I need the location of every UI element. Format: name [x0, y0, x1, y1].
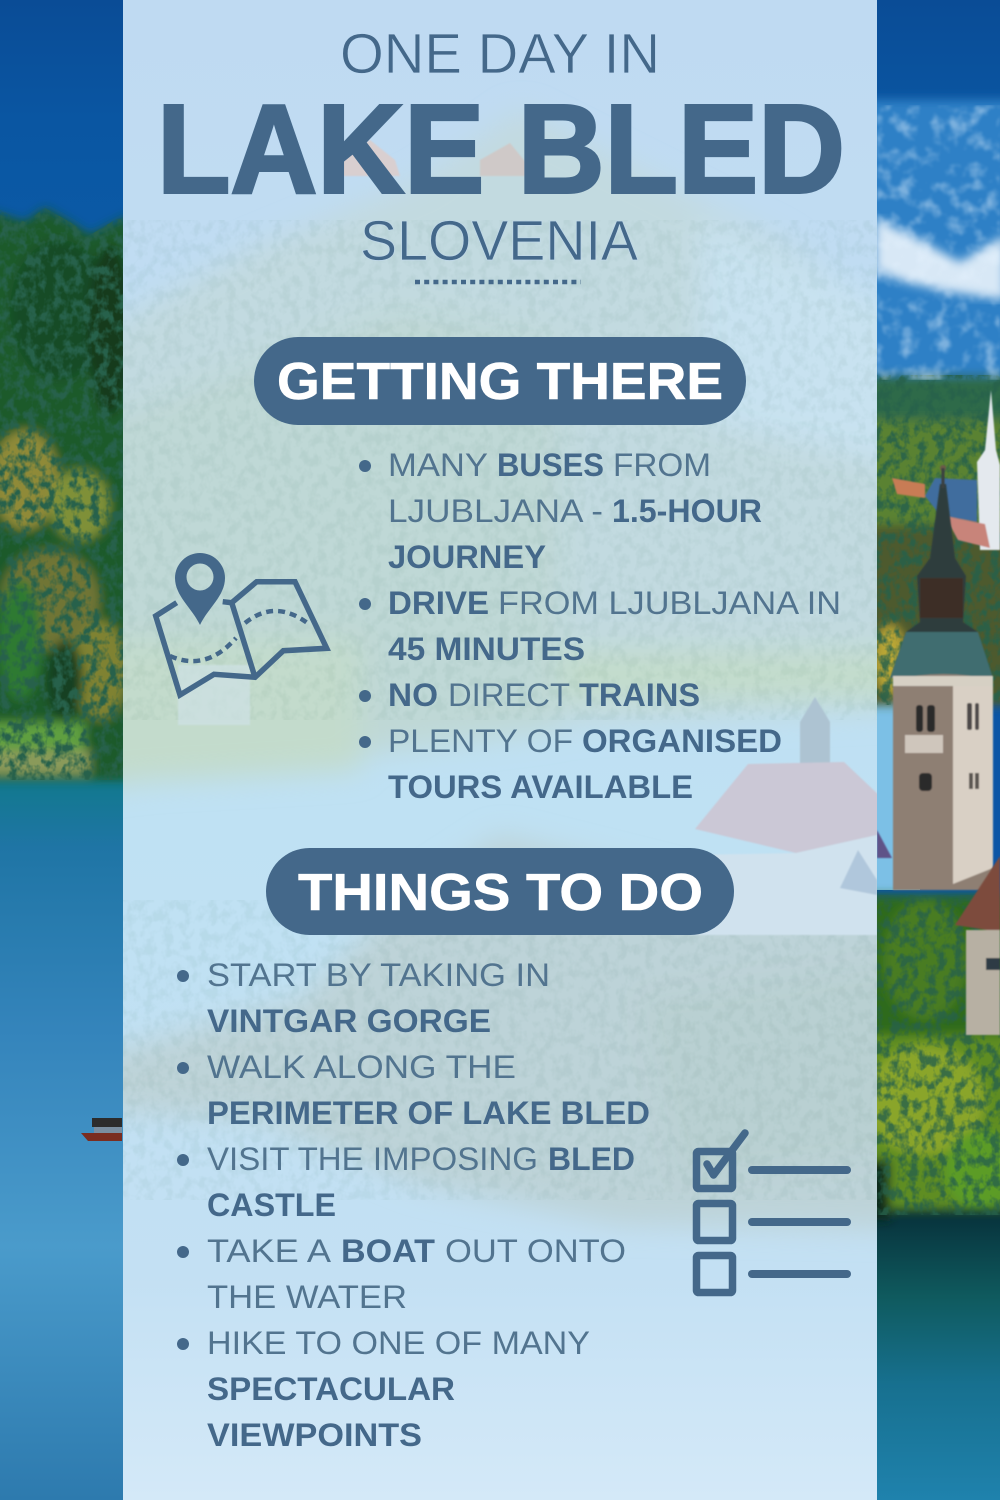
- item: trains: TRAINS: [579, 677, 700, 713]
- item: boat: TAKE A: [207, 1233, 332, 1269]
- house behind the trees: [955, 856, 1000, 1035]
- item: buses: MANY: [388, 447, 488, 483]
- item: viewpoints: VIEWPOINTS: [207, 1417, 422, 1453]
- item: viewpoints: SPECTACULAR: [207, 1371, 455, 1407]
- distant church on right hill: [892, 390, 1000, 550]
- item: boat: THE WATER: [207, 1279, 407, 1315]
- bell tower: [877, 465, 993, 890]
- title: slovenia: SLOVENIA: [360, 209, 638, 273]
- far mountain and sky: [0, 0, 1000, 270]
- item: buses: FROM: [613, 447, 711, 483]
- item: trains: [359, 677, 700, 713]
- item: viewpoints: [177, 1325, 590, 1453]
- icon: checklist: [696, 1133, 847, 1292]
- list: getting there: [359, 447, 841, 805]
- heading pill: things to do: THINGS TO DO: [298, 864, 703, 922]
- item: boat: OUT ONTO: [445, 1233, 626, 1269]
- item: buses: LJUBLJANA -: [388, 493, 603, 529]
- item: buses: BUSES: [497, 447, 604, 483]
- title: lake bled: LAKE BLED: [157, 78, 845, 220]
- foliage texture on tree areas: [0, 205, 1000, 1215]
- item: buses: 1.5-HOUR: [612, 493, 762, 529]
- lake water: [0, 690, 1000, 1500]
- faded white villa: [178, 665, 250, 725]
- item: bled castle: VISIT THE IMPOSING: [207, 1141, 538, 1177]
- item: buses: JOURNEY: [388, 539, 546, 575]
- item: perimeter walk: WALK ALONG THE: [207, 1049, 516, 1085]
- item: perimeter walk: [177, 1049, 650, 1131]
- list: things to do: [177, 957, 650, 1453]
- item: buses: [359, 447, 762, 575]
- item: vintgar gorge: VINTGAR GORGE: [207, 1003, 491, 1039]
- item: bled castle: BLED: [548, 1141, 635, 1177]
- item: trains: NO: [388, 677, 438, 713]
- heading pill: getting there: [254, 337, 746, 425]
- item: bled castle: [177, 1141, 635, 1223]
- blurred landscape masses: [0, 100, 1000, 1220]
- title: one day in: ONE DAY IN: [340, 22, 660, 86]
- item: boat: BOAT: [341, 1233, 435, 1269]
- item: tours: TOURS AVAILABLE: [388, 769, 693, 805]
- item: perimeter walk: PERIMETER OF LAKE BLED: [207, 1095, 650, 1131]
- item: bled castle: CASTLE: [207, 1187, 336, 1223]
- item: boat: [177, 1233, 626, 1315]
- item: drive: DRIVE: [388, 585, 489, 621]
- white rock patch on mountain: [875, 218, 1000, 300]
- item: drive: 45 MINUTES: [388, 631, 585, 667]
- faded church on the island: [690, 697, 900, 935]
- item: tours: ORGANISED: [582, 723, 782, 759]
- icon: map with location pin: [156, 553, 327, 695]
- item: trains: DIRECT: [448, 677, 570, 713]
- item: tours: PLENTY OF: [388, 723, 573, 759]
- item: tours: [359, 723, 782, 805]
- item: drive: FROM LJUBLJANA IN: [498, 585, 841, 621]
- dotted divider: [415, 280, 581, 284]
- item: vintgar gorge: START BY TAKING IN: [207, 957, 550, 993]
- mottled mountain forest: [877, 105, 1000, 380]
- item: vintgar gorge: [177, 957, 550, 1039]
- boat on the lake: [81, 1118, 122, 1141]
- faded castle on the rock: [338, 140, 532, 176]
- heading pill: things to do: [266, 848, 734, 935]
- heading pill: getting there: GETTING THERE: [277, 353, 723, 411]
- item: drive: [359, 585, 841, 667]
- item: viewpoints: HIKE TO ONE OF MANY: [207, 1325, 590, 1361]
- title block: [157, 22, 845, 282]
